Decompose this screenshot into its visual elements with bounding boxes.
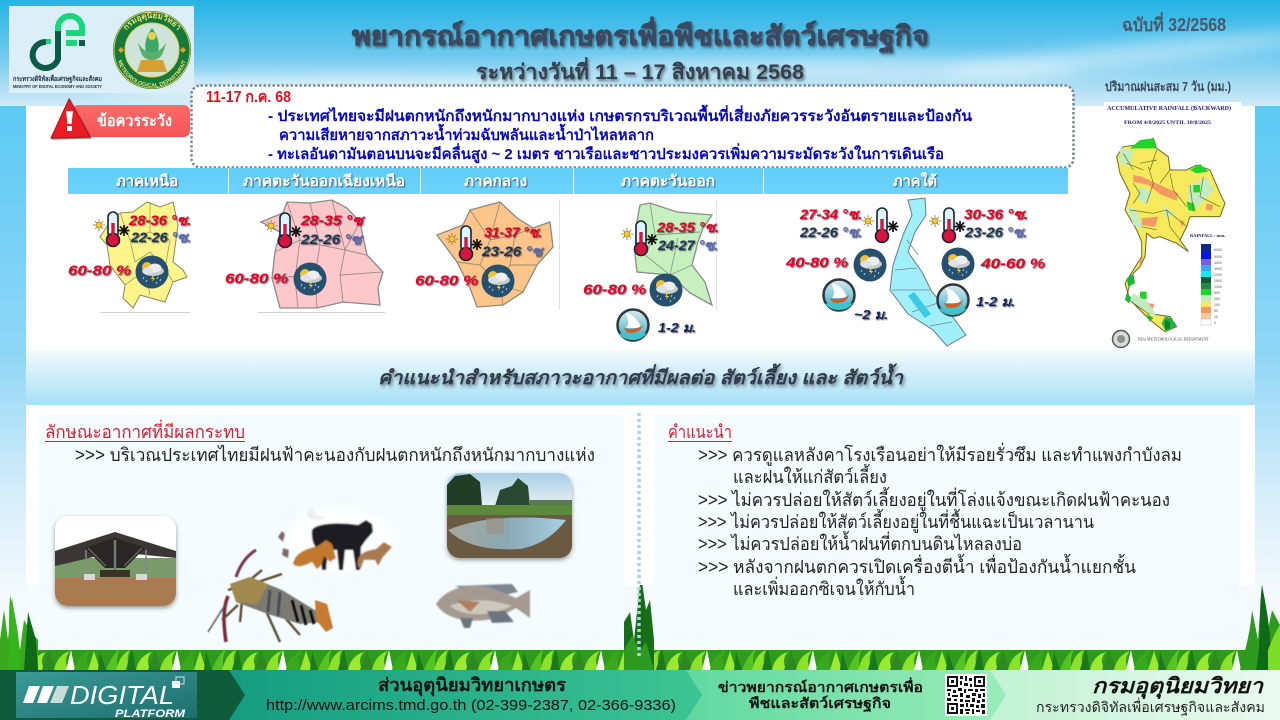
icon: thermometer: [621, 221, 658, 256]
issue number: ฉบับที่ 32/2568: [1122, 12, 1226, 35]
icon: storm: [136, 256, 168, 288]
panel: east region: [583, 200, 719, 340]
rainfall legend: 3000: [1214, 267, 1222, 271]
temperature: northeast: [300, 212, 366, 247]
footer: meteorological department: [1036, 675, 1265, 716]
header row: regions: ภาคตะวันออกเฉียงเหนือ: [243, 173, 405, 190]
temperature: north: 22-26 °ซ.: [130, 229, 191, 245]
temperature: north: [128, 212, 191, 245]
footer: agricultural weather news: [718, 677, 923, 713]
text: advice list: และเพิ่มออกซิเจนให้กับน้ำ: [733, 576, 915, 599]
map: central: [437, 199, 560, 310]
icon: thermometer: [265, 213, 302, 248]
warning text: [268, 104, 973, 164]
panel: north region: [68, 202, 191, 312]
QR code: [945, 674, 987, 716]
map: east: [635, 200, 716, 310]
panel: main white sheet: [26, 106, 1255, 650]
temperature: south west: 22-26 °ซ.: [799, 224, 862, 240]
rainfall legend: 1000: [1214, 285, 1222, 289]
temperature: east: 24-27 °ซ.: [657, 237, 718, 253]
heading: advice: คำแนะนำ: [668, 422, 732, 442]
panel: rainfall map: [1104, 79, 1241, 352]
icon: department seal small: [1112, 330, 1209, 348]
temperature: south east: 23-26 °ซ.: [964, 224, 1027, 240]
footer: meteorological department: กระทรวงดิจิทัลเพื่อเศรษฐกิจและสังคม: [1036, 698, 1265, 716]
text: advice list: [698, 442, 1182, 599]
footer: agrometeorology division: http://www.arcims.tmd.go.th (02-399-2387, 02-366-9336): [266, 697, 676, 714]
photo: fish pond: [447, 473, 572, 558]
footer: agrometeorology division: ส่วนอุตุนิยมวิทยาเกษตร: [378, 675, 566, 697]
icon: department seal small: THAI METEOROLOGICAL DEPARTMENT: [1137, 336, 1209, 342]
rainfall legend: 6000: [1214, 248, 1222, 252]
map: north: [100, 202, 190, 312]
rain chance: central: 60-80 %: [415, 272, 479, 288]
rain chance: south east: 40-60 %: [980, 255, 1046, 271]
wave height: south west: ~2 ม.: [854, 307, 888, 322]
logo: digital platform: PLATFORM: [115, 708, 186, 720]
icon: storm west: [854, 248, 886, 282]
panel: advice: [654, 415, 1240, 648]
footer: agricultural weather news: ข่าวพยากรณ์อากาศเกษตรเพื่อ: [718, 677, 923, 695]
text: advice list: >>> ควรดูแลหลังคาโรงเรือนอย่าให้มีรอยรั่วซึม และทำแพงกำบังลม: [698, 442, 1182, 466]
header row: regions: [68, 168, 1068, 194]
photo: farm animals: [278, 504, 402, 576]
panel: weather impact: [38, 415, 624, 650]
rainfall legend: 10: [1214, 315, 1218, 319]
heading: weather impact: ลักษณะอากาศที่มีผลกระทบ: [45, 419, 245, 442]
text: advice list: >>> หลังจากฝนตกควรเปิดเครื่องตีน้ำ เพื่อป้องกันน้ำแยกชั้น: [698, 554, 1136, 577]
icon: thermometer west: [862, 208, 898, 242]
icon: storm east: [942, 248, 974, 280]
header row: regions: ภาคตะวันออก: [621, 173, 715, 190]
text: weather impact: >>> บริเวณประเทศไทยมีฝนฟ้าคะนองกับฝนตกหนักถึงหนักมากบางแห่ง: [75, 444, 595, 465]
temperature: central: 23-26 °ซ: [481, 243, 545, 259]
callout: warning label: [51, 99, 190, 138]
rainfall legend: 4000: [1214, 261, 1222, 265]
footer: agricultural weather news: พืชและสัตว์เศรษฐกิจ: [749, 695, 891, 713]
text: advice list: >>> ไม่ควรปล่อยให้สัตว์เลี้ยงอยู่ในที่โล่งแจ้งขณะเกิดฝนฟ้าคะนอง: [698, 487, 1170, 511]
icon: boat east: [938, 284, 968, 316]
rainfall legend: 50: [1214, 309, 1218, 313]
footer: meteorological department: กรมอุตุนิยมวิทยา: [1092, 675, 1264, 699]
rain chance: east: 60-80 %: [583, 281, 647, 297]
panel: advice heading band: [26, 350, 1255, 405]
icon: boat west: [824, 280, 854, 310]
temperature: north: 28-36 °ซ.: [128, 212, 191, 228]
subtitle: date range: ระหว่างวันที่ 11 – 17 สิงหาคม 2568: [476, 56, 804, 84]
rainfall legend: 1500: [1214, 279, 1222, 283]
map: south: [890, 198, 966, 346]
grass border: [0, 575, 1280, 670]
warning text: - ประเทศไทยจะมีฝนตกหนักถึงหนักมากบางแห่ง เกษตรกรบริเวณพื้นที่เสี่ยงภัยควรระวังอันตรายและป้องกัน: [268, 104, 973, 125]
temperature: south west: [799, 206, 862, 240]
panel: advice heading band: คำแนะนำสำหรับสภาวะอากาศที่มีผลต่อ สัตว์เลี้ยง และ สัตว์น้ำ: [378, 363, 904, 389]
temperature: east: 28-35 °ซ.: [656, 219, 719, 235]
rainfall chart title: ACCUMULATIVE RAINFALL (BACKWARD): [1107, 105, 1231, 112]
photo: spiny lobster: [208, 550, 333, 642]
icon: thermometer: [446, 226, 482, 260]
rain chance: south west: 40-80 %: [785, 254, 849, 270]
rainfall legend: 0: [1214, 321, 1216, 325]
footer: agrometeorology division: [266, 675, 676, 714]
warning date: 11-17 ก.ค. 68: [206, 89, 291, 106]
icon: meteorological department seal: [113, 11, 191, 89]
temperature: northeast: 28-35 °ซ: [300, 212, 366, 228]
panel: logos: [9, 6, 194, 93]
rain chance: northeast: 60-80 %: [225, 270, 289, 286]
rainfall chart title: [1107, 105, 1231, 126]
rainfall chart title: FROM 4/8/2025 UNTIL 10/8/2025: [1124, 120, 1211, 126]
icon: thermometer east: [929, 208, 966, 242]
icon: thermometer: [93, 212, 130, 246]
rainfall legend: RAINFALL : mm.: [1190, 233, 1225, 238]
callout: warning label: ข้อควรระวัง: [97, 112, 172, 130]
rainfall legend: 5000: [1214, 255, 1222, 259]
temperature: central: 31-37 °ซ.: [484, 224, 542, 240]
logo: digital platform: DIGITAL: [70, 680, 174, 710]
icon: storm: [650, 274, 682, 306]
rain chance: north: 60-80 %: [68, 262, 132, 278]
rainfall legend: 500: [1214, 291, 1220, 295]
header row: regions: ภาคใต้: [893, 172, 937, 190]
photo: tilapia fish: [436, 584, 530, 628]
icon: meteorological department seal: METEOROLOGICAL DEPARTMENT: [118, 60, 186, 87]
panel: northeast region: [225, 200, 385, 312]
map: northeast: [258, 200, 385, 312]
text: ministry name: MINISTRY OF DIGITAL ECONOMY AND SOCIETY: [13, 84, 102, 89]
text: advice list: และฝนให้แก่สัตว์เลี้ยง: [733, 464, 887, 487]
temperature: south west: 27-34 °ซ.: [799, 206, 862, 222]
temperature: central: [481, 224, 545, 259]
rainfall map of Thailand: [1117, 138, 1225, 332]
warning text: - ทะเลอันดามันตอนบนจะมีคลื่นสูง ~ 2 เมตร ชาวเรือและชาวประมงควรเพิ่มความระมัดระวังในการเดินเรือ: [268, 143, 944, 164]
header row: regions: ภาคกลาง: [464, 173, 527, 190]
warning text: ความเสียหายจากสภาวะน้ำท่วมฉับพลันและน้ำป่าไหลหลาก: [279, 123, 654, 144]
icon: meteorological department seal: กรมอุตุนิยมวิทยา: [124, 12, 180, 30]
rainfall legend: [1190, 233, 1225, 325]
temperature: south east: 30-36 °ซ.: [964, 206, 1028, 222]
panel: warning box: [192, 86, 1074, 168]
photo: livestock barn: [55, 516, 176, 606]
footer: [0, 670, 1280, 720]
wave height: east: 1-2 ม.: [658, 320, 696, 335]
title: พยากรณ์อากาศเกษตรเพื่อพืชและสัตว์เศรษฐกิจ: [352, 16, 929, 54]
temperature: northeast: 22-26 °ซ: [300, 231, 364, 247]
panel: south region: [785, 198, 1046, 346]
icon: ministry logo: [33, 16, 85, 68]
temperature: south east: [964, 206, 1028, 240]
icon: boat and wave: [618, 310, 648, 340]
wave height: south east: 1-2 ม.: [976, 294, 1015, 309]
text: advice list: >>> ไม่ควรปล่อยให้น้ำฝนที่ตกบนดินไหลลงบ่อ: [698, 531, 1022, 554]
rainfall heading: ปริมาณฝนสะสม 7 วัน (มม.): [1105, 79, 1231, 94]
header row: regions: ภาคเหนือ: [116, 173, 178, 190]
text: advice list: >>> ไม่ควรปล่อยให้สัตว์เลี้ยงอยู่ในที่ชื้นแฉะเป็นเวลานาน: [698, 509, 1094, 533]
logo: digital platform: [16, 672, 197, 720]
text: ministry name: กระทรวงดิจิทัลเพื่อเศรษฐกิจและสังคม: [13, 73, 102, 84]
temperature: east: [656, 219, 719, 253]
text: ministry name: [13, 73, 102, 89]
rainfall legend: 100: [1214, 303, 1220, 307]
rainfall legend: 2000: [1214, 273, 1222, 277]
icon: storm: [294, 262, 326, 296]
panel: central region: [415, 199, 560, 310]
icon: storm: [482, 264, 514, 298]
rainfall legend: 250: [1214, 297, 1220, 301]
